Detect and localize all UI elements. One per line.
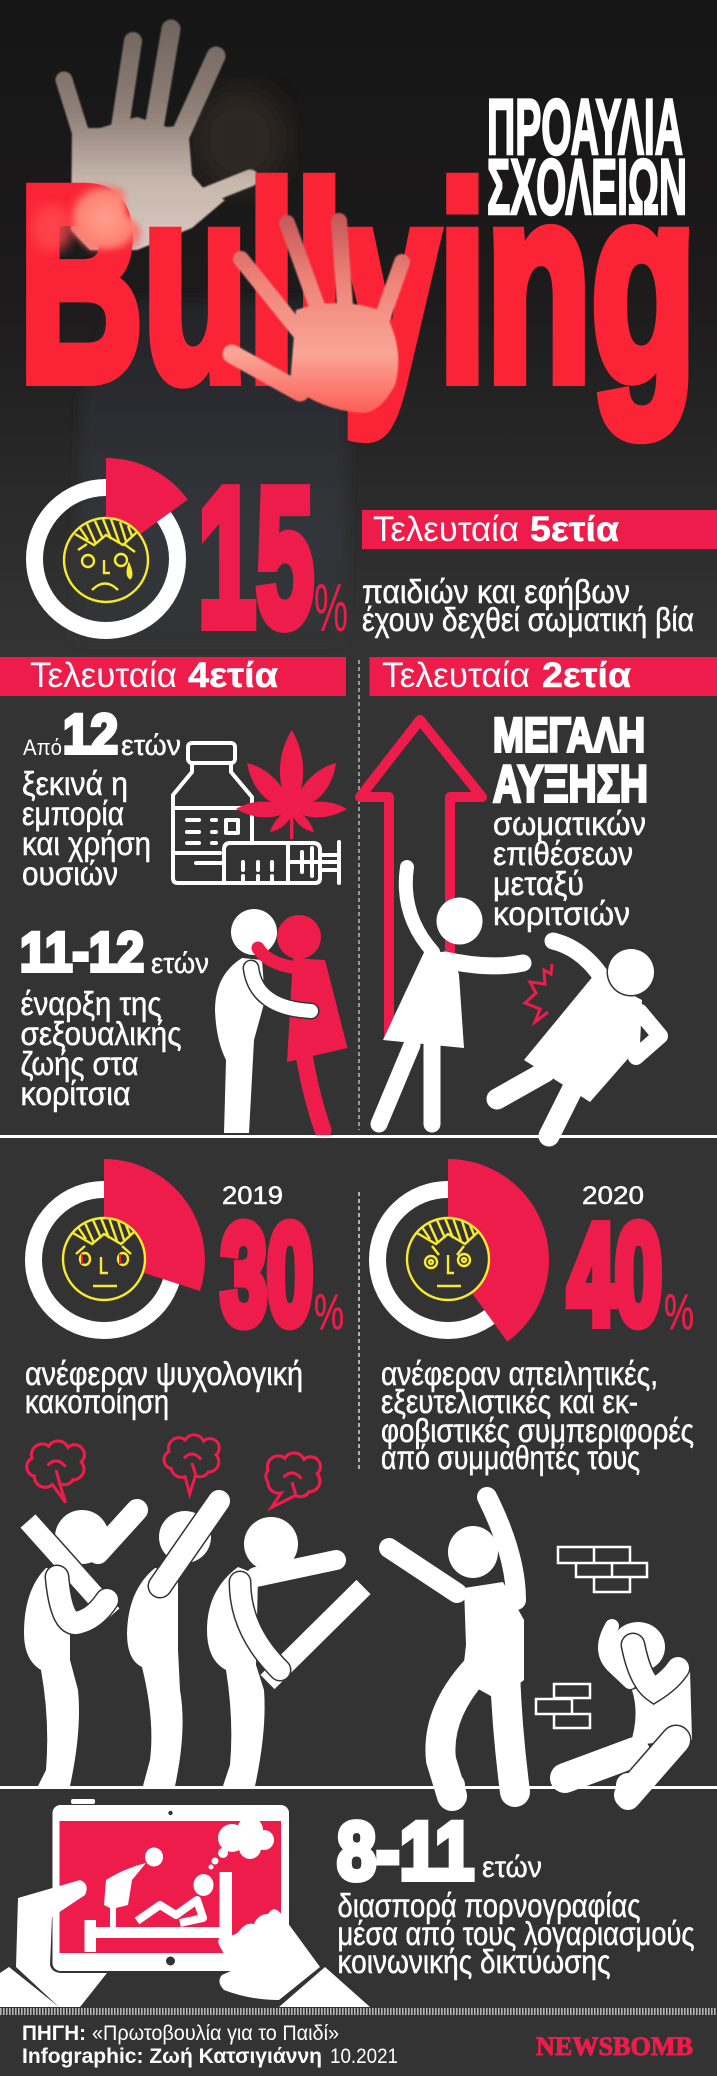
text: 15% description: παιδιών και εφήβων: [362, 573, 630, 610]
stat: 2019 30%: %: [314, 1284, 344, 1340]
donut chart 40% with angry face: [378, 1159, 549, 1342]
text: threatening behaviour: εξευτελιστικές και εκ-: [381, 1383, 638, 1420]
stat: 8-11 years: ετών: [482, 1851, 542, 1884]
source credits: [22, 2022, 398, 2068]
text: threatening behaviour: από συμμαθητές τους: [381, 1439, 640, 1476]
text: from 12 years: ετών: [121, 730, 181, 762]
left hand: [16, 1880, 107, 2007]
icon: bully figure 3: [207, 1517, 364, 1786]
source credits: ΠΗΓΗ:: [22, 2022, 86, 2045]
icon: girl hitting: [379, 867, 523, 1124]
stat: 8-11 years: 8-11: [337, 1806, 474, 1897]
icon: anger clouds: [27, 1435, 320, 1507]
icon: bricks upper: [558, 1547, 647, 1592]
banner: Τελευταία 5ετία: 5ετία: [530, 510, 620, 549]
banner: Τελευταία 4ετία: Τελευταία: [30, 656, 177, 695]
hero photo background: [0, 0, 717, 640]
banner: Τελευταία 5ετία: Τελευταία: [373, 510, 519, 549]
hero hand tint over the B: [32, 185, 142, 252]
logo: NEWSBOMB: NEWSBOMB: [536, 2032, 693, 2061]
banner: Τελευταία 2ετία: Τελευταία: [382, 656, 530, 695]
source credits: 10.2021: [330, 2045, 398, 2068]
text: big rise in attacks: [493, 710, 648, 932]
divider lower: [358, 1192, 360, 1472]
text: from 12 years: Από: [23, 735, 62, 760]
icon: crying face: [64, 518, 148, 602]
arrow: big rise: [360, 720, 482, 1035]
heading: ΠΡΟΑΥΛΙΑ ΣΧΟΛΕΙΩΝ: [487, 82, 687, 231]
text: 11-12 years: ετών: [151, 948, 209, 980]
donut chart 30% with neutral face: [34, 1159, 205, 1330]
icon: victim sitting: [565, 1622, 692, 1795]
icon: embracing couple: [215, 909, 348, 1133]
icon: tablet with hands: [0, 1799, 370, 2007]
text: 11-12 years: σεξουαλικής: [20, 1015, 182, 1052]
text: psychological abuse: [25, 1355, 303, 1420]
source credits: «Πρωτοβουλία για το Παιδί»: [92, 2022, 339, 2045]
hero hand: small, tinted: [232, 221, 402, 413]
text: 11-12 years: 11-12: [20, 920, 144, 983]
banner: Τελευταία 4ετία: [0, 656, 346, 696]
stat: 15%: [198, 448, 348, 667]
icon: legs crossing divider: [453, 1785, 628, 1798]
icon: bully figure 2: [127, 1501, 219, 1786]
divider upper: [358, 660, 360, 1130]
stat: 15%: %: [314, 570, 348, 646]
stat: 15%: 15: [198, 448, 314, 667]
icon: bottle, cannabis leaf, syringe: [173, 730, 347, 883]
icon: angry face: [407, 1218, 489, 1300]
donut chart 15% with sad face: [34, 458, 188, 630]
icon: girl falling: [497, 941, 660, 1136]
banner: Τελευταία 2ετία: 2ετία: [542, 656, 632, 695]
text: from 12 years: εμπορία: [22, 795, 124, 832]
text: threatening behaviour: ανέφεραν απειλητικές,: [381, 1355, 658, 1392]
divider line: [0, 1135, 717, 1138]
hero hand: large: [64, 29, 250, 250]
banner: Τελευταία 4ετία: 4ετία: [188, 656, 279, 695]
text: from 12 years: ξεκινά η: [22, 765, 128, 802]
text: big rise in attacks: μεταξύ: [493, 865, 584, 902]
text: 11-12 years: έναρξη της: [20, 985, 162, 1022]
divider line bottom: [0, 1786, 717, 1789]
text: pornography spread: κοινωνικής δικτύωσης: [338, 1943, 610, 1980]
icon: victim standing: [389, 1497, 524, 1796]
text: big rise in attacks: ΜΕΓΑΛΗ: [493, 710, 645, 762]
text: big rise in attacks: κοριτσιών: [493, 895, 630, 932]
banner: Τελευταία 5ετία: [362, 510, 717, 549]
icon: impact mark: [525, 964, 552, 1022]
text: psychological abuse: ανέφεραν ψυχολογική: [25, 1355, 303, 1392]
text: from 12 years: 12: [63, 702, 118, 765]
text: threatening behaviour: [381, 1355, 694, 1476]
text: from 12 years: [22, 702, 181, 892]
text: pornography spread: [338, 1887, 694, 1980]
icon: bricks lower: [536, 1684, 590, 1728]
text: big rise in attacks: σωματικών: [493, 805, 646, 842]
text: from 12 years: και χρήση: [22, 825, 151, 862]
text: from 12 years: ουσιών: [22, 855, 118, 892]
hatched footer band: [0, 2008, 717, 2015]
icon: neutral face: [63, 1218, 145, 1300]
banner: Τελευταία 2ετία: [370, 656, 717, 696]
text: big rise in attacks: ΑΥΞΗΣΗ: [493, 756, 648, 814]
text: 15% description: [362, 573, 694, 638]
stat: 2020 40%: %: [664, 1284, 694, 1340]
text: psychological abuse: κακοποίηση: [25, 1383, 169, 1420]
icon: bully figure 1: [24, 1510, 137, 1786]
stat: 2019 30%: 30: [221, 1195, 313, 1353]
source credits: Infographic: Ζωή Κατσιγιάννη: [22, 2045, 322, 2068]
screen figures: [84, 1817, 274, 1952]
right hand: [218, 1909, 320, 2000]
text: 11-12 years: κορίτσια: [20, 1075, 130, 1112]
text: 11-12 years: ζωής στα: [20, 1045, 138, 1082]
text: 11-12 years: [20, 920, 209, 1112]
text: pornography spread: διασπορά πορνογραφίας: [338, 1887, 640, 1924]
text: big rise in attacks: επιθέσεων: [493, 835, 633, 872]
stat: 2020 40%: 2020: [582, 1182, 644, 1210]
stat: 2019 30%: 2019: [222, 1182, 283, 1210]
